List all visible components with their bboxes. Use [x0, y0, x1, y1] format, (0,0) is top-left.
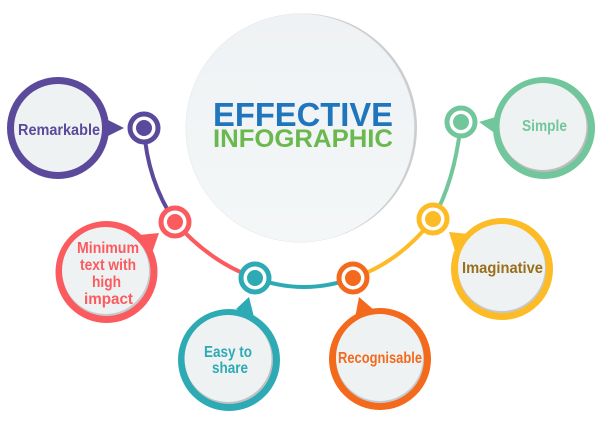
callout: Recognisable [329, 297, 431, 410]
node: green [447, 108, 475, 136]
callout: Imaginative: Imaginative [462, 260, 543, 277]
callout: Minimum text with high impact: impact [84, 291, 134, 308]
callout: Easy to share: Easy to [204, 344, 252, 361]
connector: red arc [175, 222, 255, 278]
callout: Minimum text with high impact: Minimum [77, 240, 139, 257]
callout: Simple: Simple [522, 118, 567, 135]
node: orange [339, 264, 367, 292]
connector: purple arc [144, 128, 175, 222]
callout: Remarkable [7, 77, 124, 179]
node: teal [241, 264, 269, 292]
callout: Easy to share: share [212, 360, 248, 377]
node: yellow [419, 205, 447, 233]
title: EFFECTIVE: EFFECTIVE [213, 96, 393, 133]
callout: Recognisable: Recognisable [338, 350, 422, 367]
connector: teal arc [255, 278, 353, 287]
callout: Easy to share [178, 297, 280, 411]
callout: Remarkable: Remarkable [18, 122, 100, 139]
central circle with title [186, 14, 417, 242]
title: INFOGRAPHIC: INFOGRAPHIC [213, 125, 393, 153]
callout: Minimum text with high impact: text with [80, 257, 136, 274]
callout: Minimum text with high impact [56, 221, 159, 323]
connector: green arc [433, 122, 461, 219]
node: red [161, 208, 189, 236]
node: purple [130, 114, 158, 142]
callout: Simple [479, 77, 595, 179]
callout: Minimum text with high impact: high [92, 274, 121, 291]
callout: Imaginative [449, 218, 553, 320]
connector: yellow arc [353, 219, 433, 278]
